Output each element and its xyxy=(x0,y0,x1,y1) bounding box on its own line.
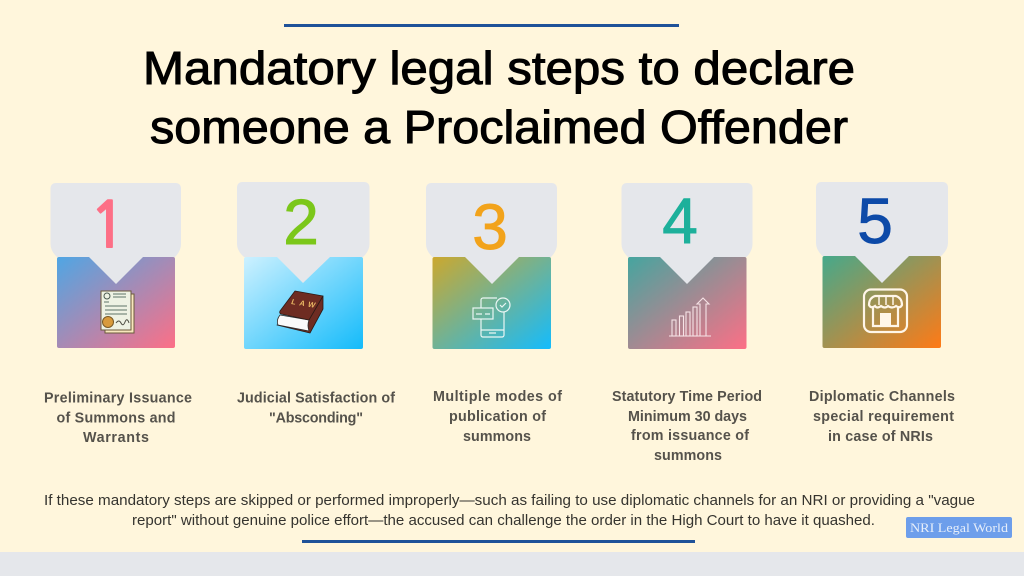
label: step 1 xyxy=(44,390,192,446)
label: step 2: "Absconding" xyxy=(269,410,363,426)
title: Mandatory legal steps to declare xyxy=(143,42,855,94)
title: someone a Proclaimed Offender xyxy=(150,101,848,153)
icon: law book: LAW xyxy=(291,297,317,310)
bottom grey band xyxy=(0,552,1024,576)
label: step 5: in case of NRIs xyxy=(828,429,933,445)
step 1 card xyxy=(50,183,181,348)
label: step 1: Preliminary Issuance xyxy=(44,390,192,406)
label: step 3: publication of xyxy=(449,409,546,425)
label: step 1: of Summons and xyxy=(56,410,176,426)
step 4 card xyxy=(622,183,752,349)
watermark badge xyxy=(906,517,1012,538)
label: step 5 xyxy=(809,389,955,445)
label: step 4: from issuance of xyxy=(631,428,749,444)
label: step 5: special requirement xyxy=(813,409,954,425)
step 2 card xyxy=(237,182,370,349)
icon: law book xyxy=(277,291,323,333)
number 5: 5 xyxy=(857,185,893,257)
title xyxy=(143,42,855,153)
label: step 2 xyxy=(237,390,395,426)
label: step 3: Multiple modes of xyxy=(433,389,562,405)
label: step 5: Diplomatic Channels xyxy=(809,389,955,405)
note text: report" without genuine police effort—the accused can challenge the order in the High Court to have it quashed. xyxy=(132,513,875,529)
label: step 4 xyxy=(612,389,762,464)
label: step 1: Warrants xyxy=(83,430,149,446)
step 3 card xyxy=(426,183,557,349)
label: step 3: summons xyxy=(463,429,531,445)
number 2: 2 xyxy=(283,186,319,258)
note text xyxy=(44,493,975,529)
watermark badge: NRI Legal World xyxy=(910,520,1009,535)
number 4: 4 xyxy=(662,185,698,257)
icon: phone with message xyxy=(473,298,510,337)
label: step 4: Statutory Time Period xyxy=(612,389,762,405)
step 5 card xyxy=(816,182,948,348)
label: step 2: Judicial Satisfaction of xyxy=(237,390,395,406)
label: step 4: Minimum 30 days xyxy=(628,409,747,425)
note text: If these mandatory steps are skipped or performed improperly—such as failing to use diplomatic channels for an NRI or providing a "vague xyxy=(44,493,975,509)
number 1: 1 xyxy=(89,194,127,258)
label: step 4: summons xyxy=(654,448,722,464)
icon: storefront xyxy=(864,290,907,332)
icon: legal document xyxy=(101,291,134,333)
number 3: 3 xyxy=(472,191,508,263)
icon: rising bar chart xyxy=(669,298,711,336)
label: step 3 xyxy=(433,389,562,445)
